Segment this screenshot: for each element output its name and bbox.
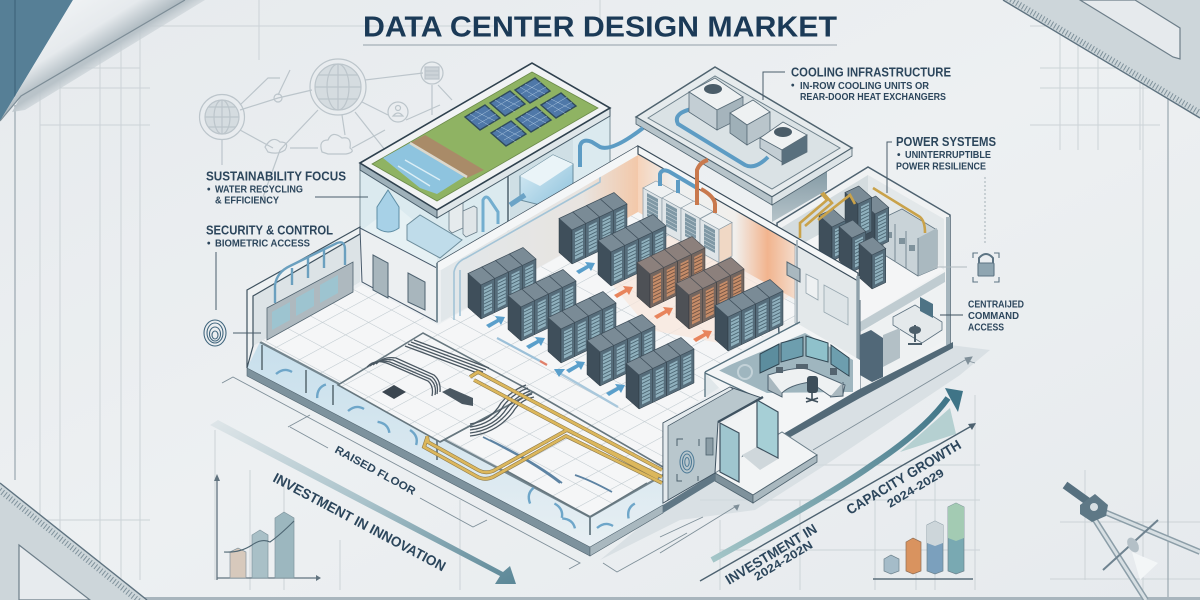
callout: cooling infrastructure: IN-ROW COOLING UNITS OR [800, 81, 930, 92]
blue coolant pipe [677, 108, 768, 166]
electrical boxes [449, 201, 477, 237]
arrow: capacity growth [700, 388, 976, 581]
blue under-floor cables [483, 437, 612, 492]
control room [705, 322, 953, 440]
switchgear panel [267, 242, 353, 340]
dark UPS battery racks [819, 186, 889, 289]
center wall with doors [360, 228, 437, 322]
icon: water drop vessel [377, 190, 399, 232]
floor cutaway panels [338, 333, 663, 517]
water tank [510, 155, 573, 205]
corner: folded blueprint page [0, 0, 205, 121]
title: DATA CENTER DESIGN MARKET [363, 12, 837, 44]
cooling unit 1 [689, 78, 743, 130]
callout: cooling infrastructure: • [791, 80, 795, 92]
entry vestibule wall and doors [663, 387, 817, 513]
arrow: investment in innovation [210, 420, 516, 584]
callout: cooling infrastructure: REAR-DOOR HEAT EXCHANGERS [800, 92, 946, 103]
callout: power systems: POWER SYSTEMS [896, 135, 996, 149]
server rows: back group [559, 192, 783, 351]
doorway floor [723, 403, 757, 468]
building shadow [600, 345, 990, 560]
gray wall [663, 387, 762, 503]
power cabinets [883, 209, 937, 276]
label: capacity years: 2024-2029 [885, 467, 946, 511]
door [373, 255, 388, 298]
label: investment in innovation: INVESTMENT IN INNOVATION [271, 470, 449, 574]
central hall wall with heat plume [638, 146, 858, 362]
dimension lines [222, 357, 975, 572]
callout: sustainability focus [206, 170, 368, 206]
callout: cooling infrastructure: COOLING INFRASTRUCTURE [791, 66, 951, 80]
ruler: bottom left [0, 483, 147, 600]
right building: power room and office [777, 167, 950, 436]
callout: centralized command access: COMMAND [968, 311, 1019, 322]
server rows: front group [468, 248, 694, 409]
office desk [860, 297, 942, 382]
bottom edge strip [0, 597, 1200, 600]
callout: security and control: SECURITY & CONTROL [206, 224, 333, 238]
label: investment years: 2024-202N [752, 539, 815, 584]
monitor wall [760, 336, 849, 376]
green roof with water feature and solar panels [360, 63, 610, 218]
solar array [465, 78, 576, 146]
callout: cooling infrastructure [763, 66, 951, 103]
water reservoir [407, 215, 462, 258]
icon: fingerprint [204, 320, 226, 346]
airflow arrows: cold aisle [486, 262, 625, 407]
wall panels [787, 262, 800, 282]
airflow arrows [276, 370, 637, 530]
callout: power systems: • [897, 150, 901, 161]
water pond [383, 143, 467, 194]
raised floor: hall floor tiles [260, 212, 806, 517]
icon: security lock [933, 253, 999, 282]
upper left water room [360, 112, 610, 268]
under-floor plenum and slab [247, 342, 663, 556]
cooling unit 2 [730, 100, 770, 145]
icon: door fingerprint scanner [677, 439, 699, 481]
callout: centralized command access [940, 300, 1024, 334]
label: capacity growth: CAPACITY GROWTH [843, 436, 964, 518]
soil strip [410, 135, 484, 178]
callout: sustainability focus: • [207, 184, 211, 196]
callout: centralized command access: ACCESS [968, 322, 1004, 334]
data cables [367, 340, 534, 436]
icon: drafting compass [1065, 485, 1200, 600]
callout: security and control [206, 224, 333, 333]
cooling pipe [483, 197, 498, 232]
yellow power conduits [424, 372, 662, 483]
bar chart: investment [214, 474, 321, 581]
bar chart: capacity growth [873, 503, 973, 579]
callout: power systems: POWER RESILIENCE [896, 162, 986, 172]
network diagram: cloud and globe icons [200, 59, 452, 200]
control desk and chair [768, 364, 845, 402]
slab [663, 432, 817, 513]
door right [757, 400, 778, 458]
pipe: water room to cooling platform [580, 128, 643, 167]
door left [720, 423, 739, 482]
label: raised floor: RAISED FLOOR [333, 444, 417, 498]
callout: security and control: BIOMETRIC ACCESS [215, 238, 310, 250]
label: investment in: INVESTMENT IN [722, 520, 820, 588]
hall back wall [437, 146, 638, 322]
dark floor edge [783, 342, 953, 440]
callout: security and control: • [207, 238, 211, 250]
callout: sustainability focus: & EFFICIENCY [215, 196, 279, 206]
yellow power pipes [800, 177, 925, 238]
warm aisle floor glow [600, 230, 790, 345]
CRAC cooling cabinets [643, 160, 732, 263]
callout: power systems: UNINTERRUPTIBLE [905, 150, 991, 161]
cooling unit 3 [760, 122, 807, 165]
cooling platform with units [636, 67, 852, 222]
callout: sustainability focus: SUSTAINABILITY FOCUS [206, 170, 346, 184]
ruler: top right [1003, 0, 1200, 118]
callout: centralized command access: CENTRAIJED [968, 300, 1024, 310]
left wall with server panel [247, 227, 360, 368]
door [408, 273, 425, 310]
callout: power systems [887, 135, 996, 245]
wall security emblem [738, 365, 752, 379]
callout: sustainability focus: WATER RECYCLING [215, 184, 303, 196]
airflow arrows: hot aisle [614, 286, 712, 342]
